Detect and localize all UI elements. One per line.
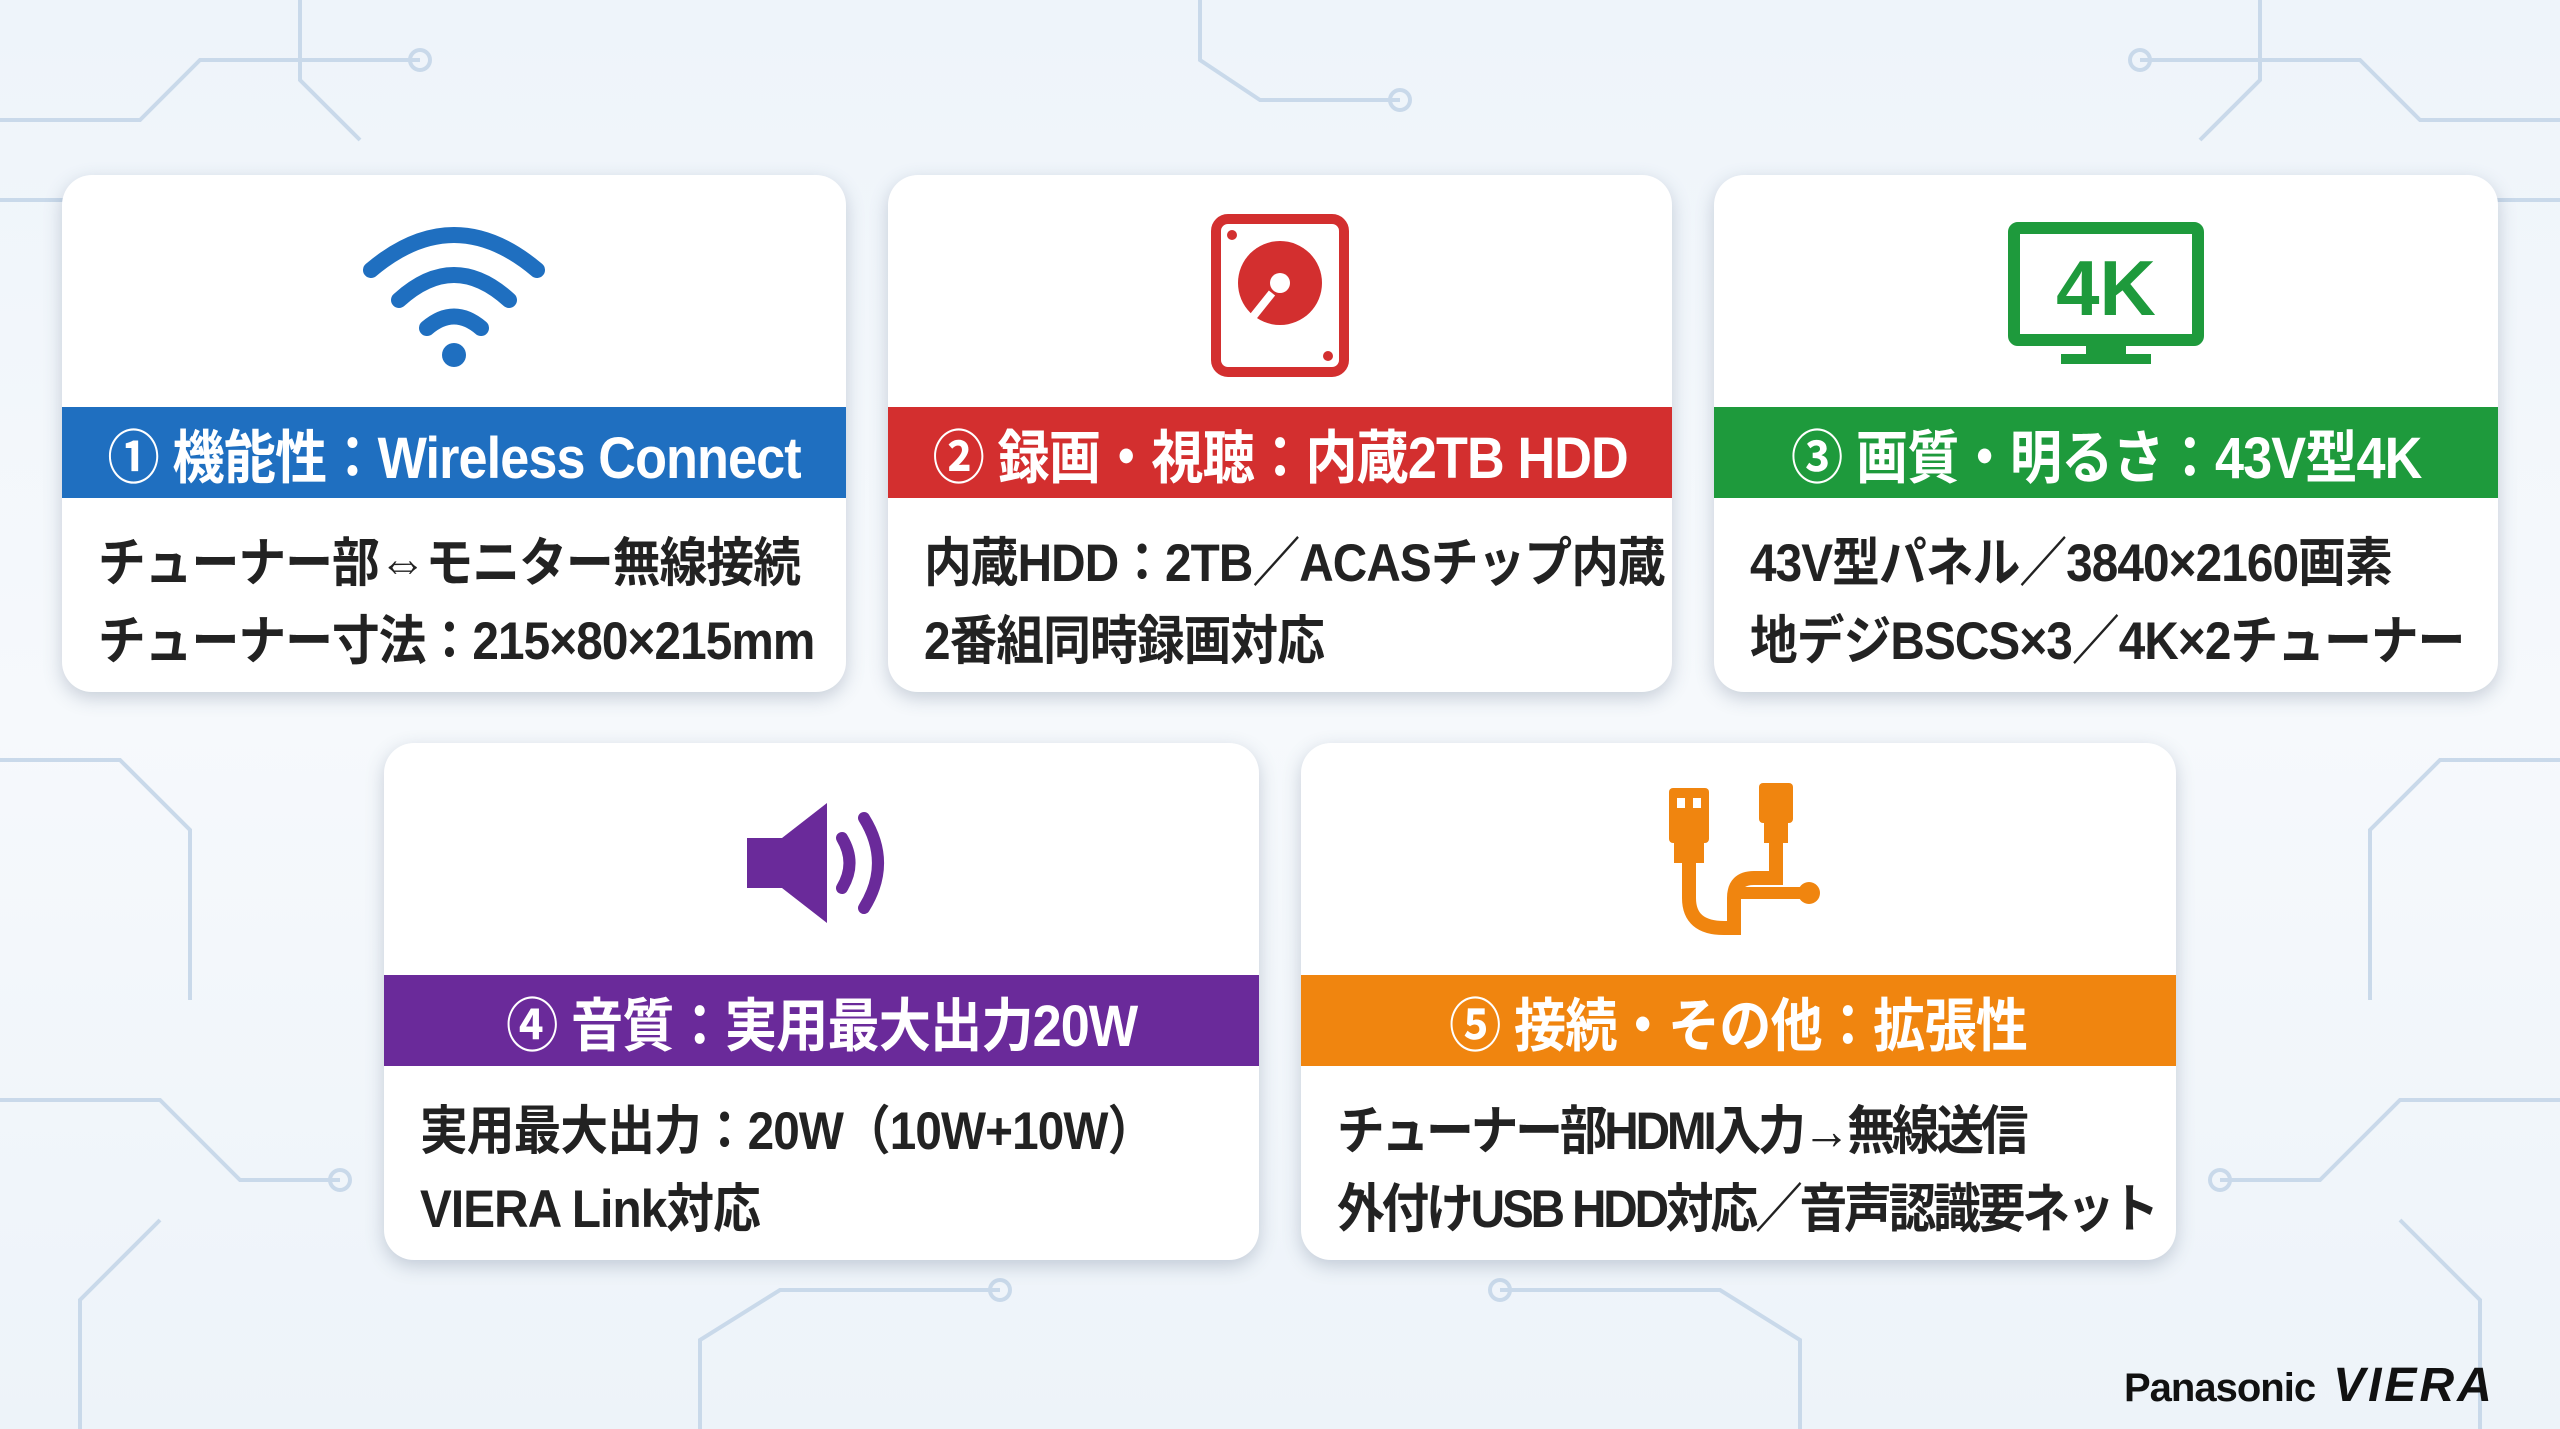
text block — [98, 534, 814, 671]
text block: 43V型パネル／3840×2160画素 — [1750, 534, 2392, 593]
text block: VIERA Link対応 — [420, 1180, 760, 1239]
logo: Panasonic VIERA: Panasonic VIERA — [2124, 1359, 2495, 1412]
text block: 内蔵HDD：2TB／ACASチップ内蔵 — [924, 534, 1665, 593]
panel: sound — [384, 743, 1259, 1260]
text block: チューナー寸法：215×80×215mm — [98, 612, 814, 671]
icon: wifi — [363, 227, 545, 367]
heading band: ① 機能性：Wireless Connect — [107, 426, 801, 490]
panel: recording — [888, 175, 1672, 692]
text block: 地デジBSCS×3／4K×2チューナー — [1750, 612, 2464, 671]
heading band: ⑤ 接続・その他：拡張性 — [1450, 994, 2027, 1058]
heading band: ② 録画・視聴：内蔵2TB HDD — [932, 426, 1628, 490]
text block — [924, 534, 1665, 671]
text block: 実用最大出力：20W（10W+10W） — [420, 1102, 1154, 1161]
text block: 外付けUSB HDD対応／音声認識要ネット — [1337, 1180, 2156, 1239]
heading band: ③ 画質・明るさ：43V型4K — [1791, 426, 2421, 490]
icon: usb cable — [1669, 783, 1820, 935]
text block — [420, 1102, 1154, 1239]
heading band — [1714, 407, 2498, 498]
text block — [1337, 1102, 2156, 1239]
heading band — [888, 407, 1672, 498]
heading band — [1301, 975, 2176, 1066]
text block: チューナー部HDMI入力→無線送信 — [1337, 1102, 2025, 1161]
text block: 2番組同時録画対応 — [924, 612, 1324, 671]
icon: speaker — [747, 803, 884, 923]
heading band: ④ 音質：実用最大出力20W — [506, 994, 1137, 1058]
heading band — [384, 975, 1259, 1066]
panel: picture quality — [1714, 175, 2498, 692]
panel: connection — [1301, 743, 2176, 1260]
icon: hdd — [1211, 214, 1349, 377]
text block — [1750, 534, 2464, 671]
icon: 4K tv: 4K — [2056, 244, 2156, 332]
panel: wireless connect — [62, 175, 846, 692]
text block: チューナー部⇔モニター無線接続 — [98, 534, 800, 593]
heading band — [62, 407, 846, 498]
icon: 4K tv — [2008, 222, 2204, 364]
